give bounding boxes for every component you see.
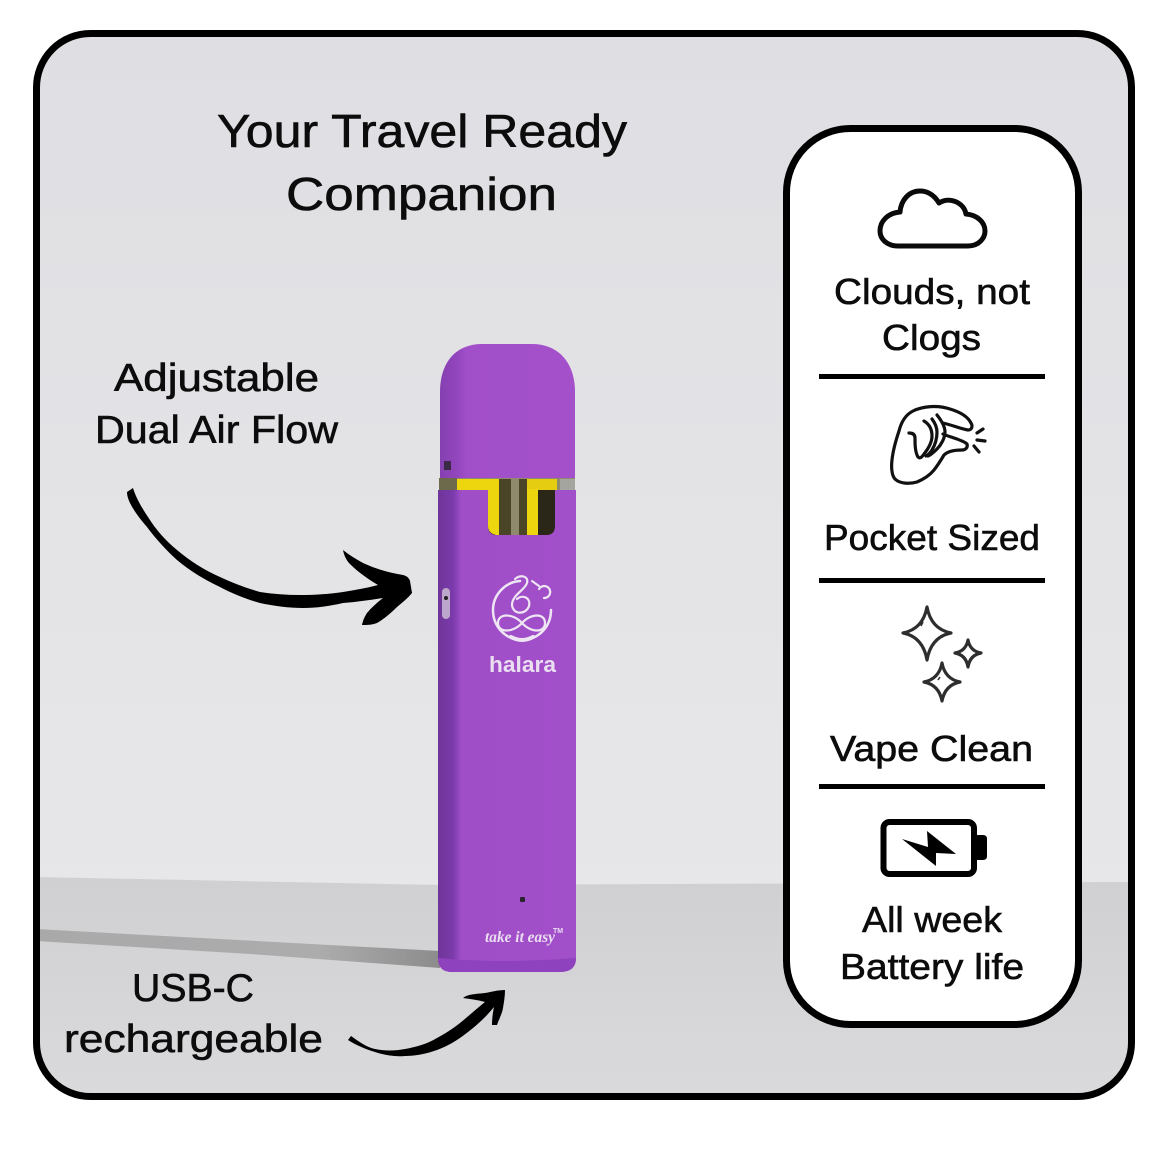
benefit: all week battery life — [840, 899, 1024, 987]
panel: benefits — [786, 128, 1078, 1024]
label: usb-c rechargeable: USB-C — [132, 967, 254, 1010]
label: adjustable dual air flow: Adjustable — [114, 357, 319, 400]
arrow to air flow — [127, 488, 412, 625]
title — [217, 105, 627, 220]
charging port dot — [520, 897, 525, 902]
halara logo — [493, 576, 551, 640]
icon: pinching hand — [892, 407, 985, 483]
product: purple vape device — [438, 344, 576, 972]
benefit: all week battery life: All week — [862, 899, 1003, 940]
label: usb-c rechargeable — [64, 967, 323, 1061]
icon: sparkles — [903, 607, 981, 701]
brand name: halara — [489, 652, 557, 677]
label: usb-c rechargeable: rechargeable — [64, 1018, 323, 1061]
benefit: vape clean: Vape Clean — [830, 728, 1033, 769]
benefit: clouds, not clogs: Clogs — [882, 317, 981, 358]
label: adjustable dual air flow: Dual Air Flow — [95, 409, 339, 452]
device body — [438, 490, 576, 972]
label: adjustable dual air flow — [95, 357, 339, 452]
device cap — [440, 344, 575, 478]
icon: cloud — [880, 191, 985, 246]
benefit: pocket sized: Pocket Sized — [824, 517, 1040, 558]
benefit: all week battery life: Battery life — [840, 946, 1024, 987]
product: purple vape device: TM — [553, 928, 563, 935]
title: Your Travel Ready — [217, 105, 627, 157]
tagline: take it easy — [485, 929, 556, 946]
cartridge window — [439, 461, 575, 535]
benefit: clouds, not clogs: Clouds, not — [834, 271, 1030, 312]
arrow to usb-c port — [348, 990, 505, 1056]
benefit: clouds, not clogs — [834, 271, 1030, 358]
icon: battery — [884, 822, 987, 874]
side button — [442, 588, 450, 619]
title: Companion — [286, 168, 557, 220]
